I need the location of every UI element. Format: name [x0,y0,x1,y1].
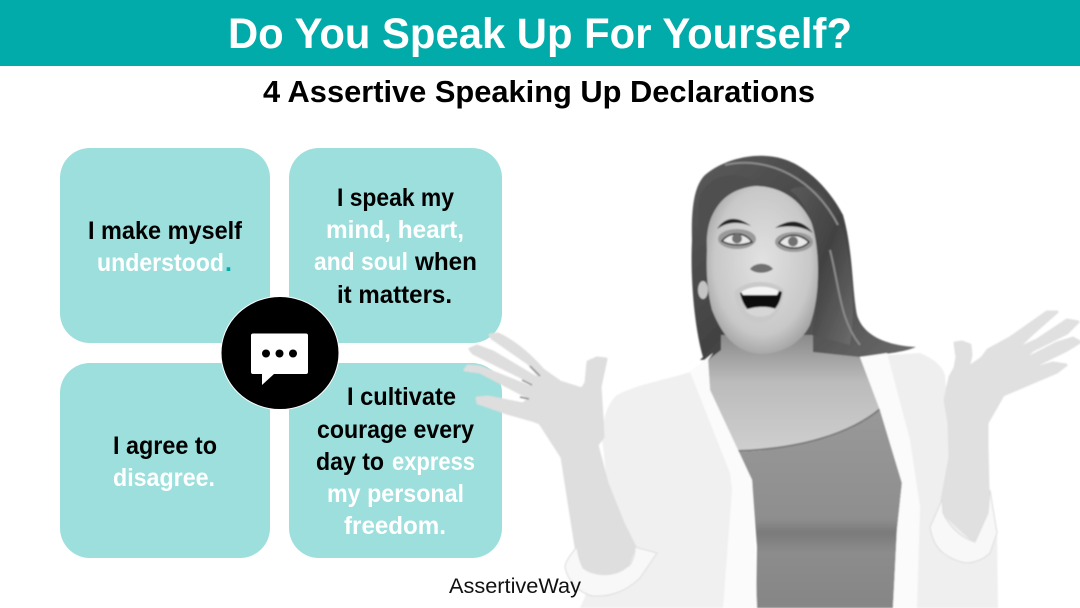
panel: I speak my mind, heart, and soul: I speak my [337,184,454,212]
panel: I cultivate courage: courage every [317,416,474,444]
right cuff [930,490,997,563]
photo: surprised woman with raised hands [465,156,1080,608]
subtitle: 4 Assertive Speaking Up Declarations [263,74,815,109]
hair back [692,156,916,360]
panel: I cultivate courage: day to [316,448,384,476]
panel: I agree to disagree: disagree. [113,464,215,492]
panel: I make myself understood: . [225,249,232,277]
mouth [734,282,784,323]
icon: speech bubble in black circle [221,296,339,410]
left cuff [565,547,657,596]
eyes [718,229,756,249]
panel: I speak my mind, heart, and soul [289,148,502,343]
panel: I speak my mind, heart, and soul: it matters. [337,281,452,309]
nose [750,264,773,273]
panel: I speak my mind, heart, and soul: when [414,248,477,276]
panel: I make myself understood: understood [97,249,224,277]
right hand and forearm [942,312,1080,542]
panel: I cultivate courage: freedom. [344,512,446,540]
brand label: AssertiveWay [449,575,582,598]
cardigan left band [690,353,757,608]
panel: I make myself understood: I make myself [88,217,243,245]
title: Do You Speak Up For Yourself? [228,10,852,58]
panel: I speak my mind, heart, and soul: and soul [314,248,408,276]
hair front [698,175,756,240]
cardigan right band [860,353,920,608]
panel: I make myself understood [60,148,270,343]
cardigan left [580,353,757,608]
cardigan right [860,353,998,608]
eyebrows [717,219,751,229]
header banner [0,0,1080,66]
panel: I cultivate courage: I cultivate [347,383,456,411]
panel: I agree to disagree: I agree to [113,432,217,460]
panel: I cultivate courage: my personal [327,480,464,508]
panel: I agree to disagree [60,363,270,558]
panel: I cultivate courage [289,363,502,558]
tank top [738,410,902,608]
panel: I cultivate courage: express [392,448,475,476]
left hand and forearm [465,334,635,575]
face [707,186,818,354]
neck and chest [708,335,880,452]
panel: I speak my mind, heart, and soul: mind, heart, [326,216,464,244]
